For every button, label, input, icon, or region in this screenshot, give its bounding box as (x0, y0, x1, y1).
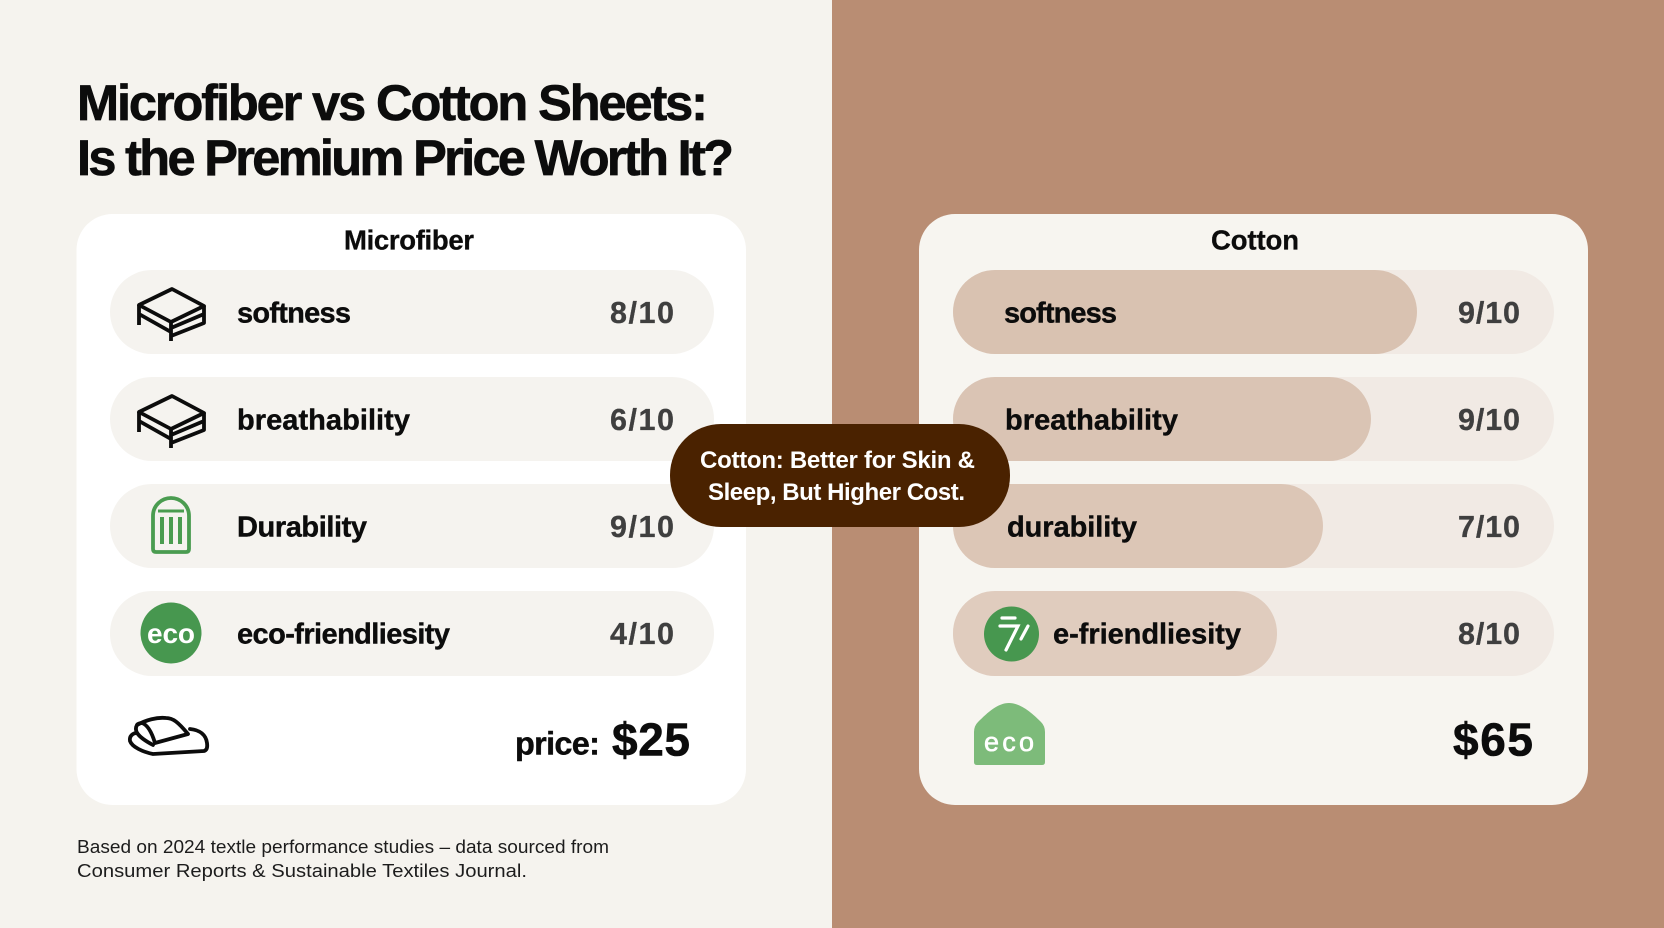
row: eco-friendliness: 4/10 (610, 617, 674, 651)
panel: microfiber (76, 214, 746, 805)
row: breathability: 6/10 (610, 403, 674, 437)
callout: verdict (670, 424, 1010, 527)
price: microfiber: price: (515, 726, 600, 762)
row: durability (953, 484, 1554, 568)
callout: verdict: Sleep, But Higher Cost. (708, 479, 965, 506)
price: microfiber: $25 (612, 714, 690, 766)
icon: green bin (153, 498, 189, 552)
source note: Consumer Reports & Sustainable Textiles Journal. (77, 860, 527, 881)
title: Microfiber vs Cotton Sheets: (77, 74, 708, 131)
bar: durability (953, 484, 1323, 568)
row: breathability (110, 377, 714, 461)
icon: eco house (974, 703, 1045, 765)
icon: green seven badge (984, 606, 1039, 662)
icon: folded sheets (139, 289, 204, 341)
row: eco-friendliness (953, 591, 1554, 676)
row: breathability (953, 377, 1554, 461)
title (77, 74, 734, 186)
icon: eco house: eco (984, 727, 1034, 757)
bar: softness (953, 270, 1417, 354)
row: softness: softness (1004, 298, 1117, 330)
row: softness: 9/10 (1458, 296, 1520, 330)
bar: breathability (953, 377, 1371, 461)
row: softness (110, 270, 714, 354)
row: durability: 7/10 (1458, 510, 1520, 544)
title: Is the Premium Price Worth It? (77, 129, 734, 186)
row: softness: 8/10 (610, 296, 674, 330)
icon: eco badge: eco (147, 618, 195, 649)
row: durability (110, 484, 714, 568)
row: durability: durability (1007, 512, 1137, 544)
row: eco-friendliness (110, 591, 714, 676)
left background (0, 0, 832, 928)
icon: eco badge (140, 602, 202, 664)
heading: cotton: Cotton (1211, 224, 1299, 256)
row: eco-friendliness: e-friendliesity (1053, 618, 1241, 650)
source note: Based on 2024 textle performance studies – data sourced from (77, 836, 609, 857)
heading: microfiber: Microfiber (344, 224, 474, 256)
callout: verdict: Cotton: Better for Skin & (700, 447, 975, 474)
row: durability: Durability (237, 512, 367, 544)
bar: eco-friendliness (953, 591, 1277, 676)
row: breathability: breathability (237, 404, 410, 436)
row: durability: 9/10 (610, 510, 674, 544)
row: eco-friendliness: 8/10 (1458, 617, 1520, 651)
icon: folded sheets (139, 396, 204, 448)
row: breathability: 9/10 (1458, 403, 1520, 437)
row: softness (953, 270, 1554, 354)
icon: folded cloth (130, 718, 207, 754)
price: microfiber (515, 714, 690, 766)
row: eco-friendliness: eco-friendliesity (237, 618, 450, 650)
row: breathability: breathability (1005, 404, 1178, 436)
right background (832, 0, 1664, 928)
panel: cotton (919, 214, 1588, 805)
source note (77, 836, 609, 881)
row: softness: softness (237, 298, 351, 330)
price: cotton: $65 (1453, 714, 1533, 766)
